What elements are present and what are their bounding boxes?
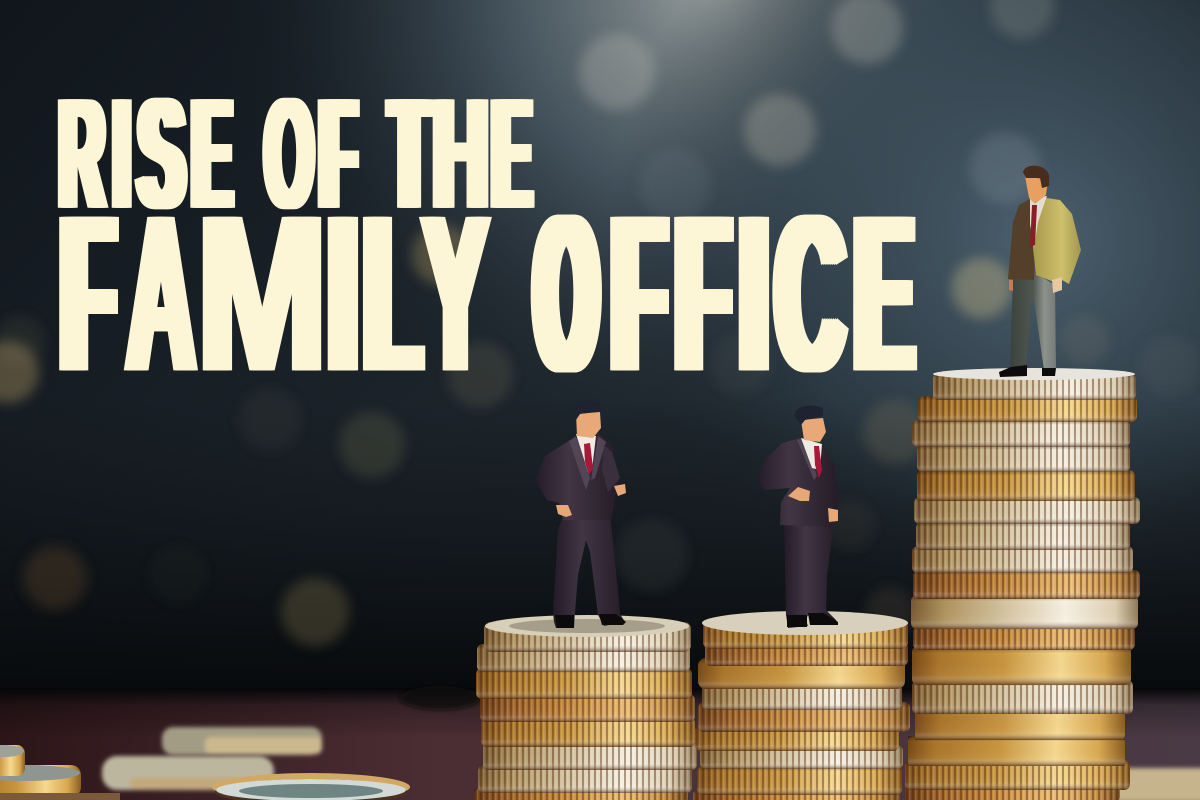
heading line two: I: [740, 170, 768, 420]
title: [58, 66, 918, 420]
figure: right man in olive jacket: [999, 166, 1081, 377]
heading line two: [59, 170, 918, 420]
heading line two: F: [677, 170, 729, 420]
heading line two: F: [613, 170, 665, 420]
icon: right coin: [1095, 768, 1200, 800]
icon: blurred coin middle: [102, 756, 274, 790]
heading line two: Y: [423, 170, 487, 420]
heading line one: E: [493, 66, 531, 241]
icon: sharp coin: [212, 773, 410, 800]
heading line one: I: [112, 66, 131, 241]
figure: middle man in dark suit: [757, 406, 838, 628]
heading line one: S: [139, 66, 184, 241]
heading line two: E: [856, 170, 912, 420]
figure: left man in dark suit: [535, 401, 626, 628]
heading line two: O: [536, 170, 596, 420]
heading line two: A: [127, 170, 194, 420]
heading line two: F: [62, 170, 114, 420]
heading line one: O: [265, 66, 313, 241]
heading line two: C: [776, 170, 844, 420]
heading line one: E: [193, 66, 231, 241]
heading line one: R: [59, 66, 104, 241]
table surface: [0, 686, 1200, 800]
icon: left coins: [0, 745, 120, 800]
coin stack right: [905, 368, 1140, 800]
heading line one: [58, 66, 843, 358]
heading line one: H: [433, 66, 488, 241]
heading line two: L: [365, 170, 420, 420]
heading line two: I: [329, 170, 357, 420]
coin stack middle: [693, 611, 910, 800]
icon: blurred coin back: [162, 727, 322, 755]
coin stack left: [474, 615, 697, 800]
heading line two: M: [197, 170, 327, 420]
foreground loose coins: [0, 727, 1200, 800]
heading line one: T: [392, 66, 426, 241]
heading line one: F: [321, 66, 355, 241]
